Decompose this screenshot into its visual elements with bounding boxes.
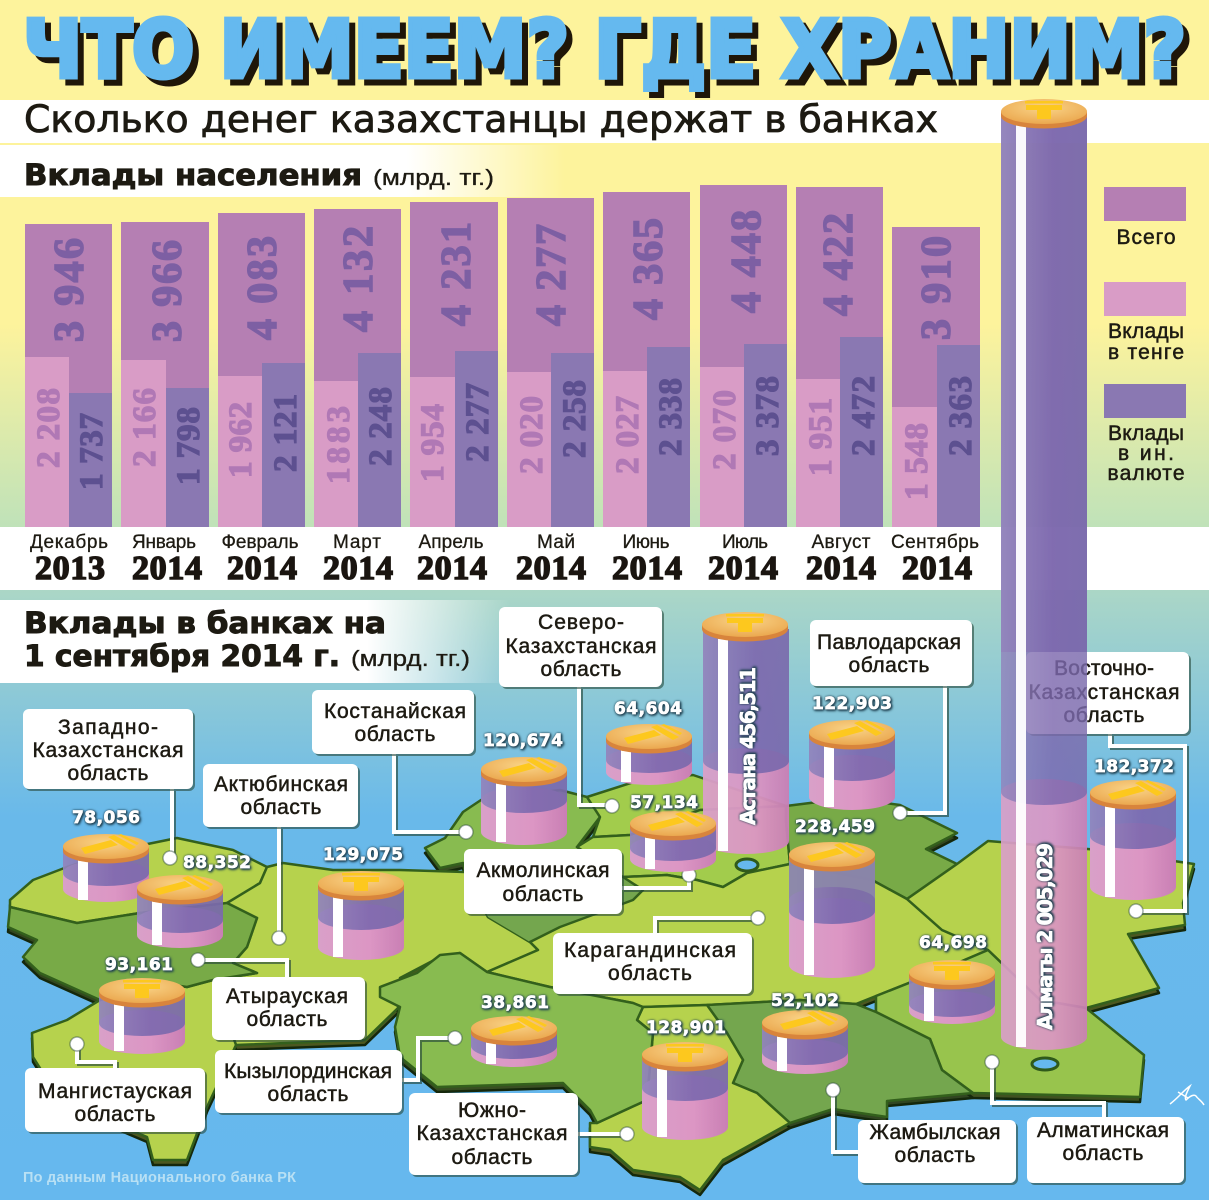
legend: Вклады	[1108, 422, 1184, 445]
heading: deposits section: (млрд. тг.)	[373, 165, 494, 190]
artist signature	[1170, 1086, 1204, 1105]
month axis band: Сентябрь	[891, 532, 979, 553]
bar group: Май 2014: 2 020	[514, 396, 550, 474]
label: Мангистауская	[25, 1068, 207, 1134]
label: Атырауская: Атырауская	[226, 985, 348, 1008]
label: Восточно-Казахстанская: Восточно-	[1054, 657, 1154, 680]
label: Актюбинская: область	[240, 796, 322, 819]
bar group: Май 2014	[507, 198, 594, 527]
label: Жамбылская: область	[894, 1144, 976, 1167]
legend: Вклады	[1108, 320, 1184, 343]
legend: Всего	[1116, 226, 1176, 249]
label: Костанайская	[312, 690, 476, 756]
cylinder: Астана 456,511	[702, 612, 789, 854]
label: Северо-Казахстанская: область	[540, 658, 622, 681]
bar group: Апрель 2014	[410, 202, 498, 527]
legend: в ин.	[1118, 442, 1174, 465]
month axis band: Февраль	[222, 532, 299, 553]
bar group: Апрель 2014: 1 954	[415, 404, 451, 482]
label: Кызылординская: Кызылординская	[224, 1060, 392, 1083]
label: Южно-Казахстанская: Южно-	[458, 1099, 526, 1122]
label: Акмолинская: область	[502, 883, 584, 906]
bar group: Март 2014: 2 248	[363, 387, 399, 466]
cylinder: Атырауская 88,352	[137, 853, 251, 948]
label: Карагандинская: область	[608, 962, 692, 985]
lake: Balkhash	[1032, 1058, 1058, 1070]
bar group: Декабрь 2013: 3 946	[47, 238, 93, 342]
month axis band: Март	[333, 532, 381, 553]
bar group: Декабрь 2013: 1 737	[74, 413, 110, 490]
label: Западно-Казахстанская	[23, 709, 195, 791]
heading: regional section	[0, 600, 510, 683]
cylinder: Мангистауская 93,161: 93,161	[105, 955, 173, 975]
label: Павлодарская	[810, 620, 974, 688]
cylinder: Костанайская 120,674: 120,674	[483, 731, 563, 751]
label: Южно-Казахстанская: область	[452, 1146, 533, 1169]
label: Костанайская: область	[354, 723, 436, 746]
heading: deposits section: Вклады населения	[24, 158, 362, 192]
label: Северо-Казахстанская: Северо-	[538, 611, 624, 634]
heading: regional section: 1 сентября 2014 г.	[24, 639, 340, 673]
label: Западно-Казахстанская: область	[68, 762, 149, 785]
label: Атырауская: область	[246, 1008, 328, 1031]
bar group: Сентябрь 2014: 1 548	[899, 423, 935, 500]
cylinder: Западно-Казахстанская 78,056	[63, 808, 149, 902]
month axis band: 2014	[902, 550, 972, 587]
bar group: Февраль 2014: 4 083	[240, 236, 286, 340]
label: Мангистауская: Мангистауская	[38, 1080, 192, 1103]
month axis band: 2014	[417, 550, 487, 587]
cylinder: Акмолинская 57,134: 57,134	[630, 793, 698, 813]
label: Северо-Казахстанская	[499, 607, 664, 689]
bar group: Август 2014: 4 422	[816, 213, 862, 316]
bar group: Январь 2014	[121, 222, 209, 527]
cylinder: Алматы 2 005,029	[1001, 99, 1087, 1050]
bar group: Февраль 2014: 1 962	[223, 402, 259, 478]
bar group: Декабрь 2013: 2 208	[31, 388, 67, 468]
month axis band: 2014	[612, 550, 682, 587]
cylinder: Атырауская 88,352: 88,352	[183, 853, 251, 873]
label: Жамбылская: Жамбылская	[870, 1121, 1000, 1144]
bar group: Июль 2014: 2 070	[707, 390, 743, 470]
month axis band: Июнь	[622, 532, 670, 553]
month axis band: Апрель	[418, 532, 484, 553]
bar group: Август 2014: 1 951	[803, 398, 839, 476]
cylinder: Павлодарская 122,903	[809, 694, 895, 810]
label: Южно-Казахстанская	[409, 1093, 580, 1177]
cylinder: Западно-Казахстанская 78,056: 78,056	[72, 808, 140, 828]
cylinder: Кызылординская 38,861: 38,861	[481, 993, 549, 1013]
label: Южно-Казахстанская: Казахстанская	[416, 1122, 568, 1145]
month axis band: Январь	[132, 532, 196, 553]
label: Восточно-Казахстанская: Казахстанская	[1028, 681, 1180, 704]
heading: deposits section	[0, 145, 565, 197]
bar group: Июнь 2014: 2 027	[610, 396, 646, 474]
cylinder: Мангистауская 93,161	[99, 955, 185, 1054]
bar group: Февраль 2014	[218, 213, 305, 527]
label: Алматинская: Алматинская	[1037, 1119, 1169, 1142]
cylinder: Северо-Казахстанская 64,604: 64,604	[614, 699, 682, 719]
month axis band: 2013	[35, 550, 105, 587]
label: Карагандинская	[553, 933, 754, 996]
label: Костанайская: Костанайская	[324, 700, 466, 723]
bar group: Апрель 2014: 2 277	[460, 383, 496, 462]
heading: regional section: Вклады в банках на	[24, 606, 386, 640]
label: Павлодарская: область	[848, 654, 930, 677]
bar group: Март 2014	[314, 209, 401, 527]
label: Карагандинская: Карагандинская	[564, 939, 736, 962]
label: Восточно-Казахстанская	[1026, 652, 1191, 736]
bar group: Февраль 2014: 2 121	[268, 394, 304, 472]
bar group: Сентябрь 2014: 2 363	[943, 376, 979, 456]
cylinder: Восточно-Казахстанская 182,372	[1090, 757, 1176, 900]
cylinder: Костанайская 120,674	[481, 731, 567, 845]
bar group: Сентябрь 2014	[892, 227, 980, 527]
bar group: Апрель 2014: 4 231	[434, 222, 480, 326]
cylinder: 64,698: 64,698	[919, 933, 987, 953]
month axis band: 2014	[323, 550, 393, 587]
month axis band	[0, 527, 1209, 590]
cylinder: Северо-Казахстанская 64,604	[606, 699, 692, 785]
bar group: Сентябрь 2014: 3 910	[914, 236, 960, 340]
cylinder: Кызылординская 38,861	[471, 993, 557, 1067]
cylinder: Павлодарская 122,903: 122,903	[812, 694, 892, 714]
bar group: Май 2014: 4 277	[529, 224, 575, 326]
bar group: Март 2014: 1883	[321, 406, 357, 484]
connector lines	[70, 686, 1187, 1154]
bar group: Июнь 2014	[603, 192, 690, 527]
label: Мангистауская: область	[74, 1103, 156, 1126]
bar group: Август 2014	[796, 187, 883, 527]
heading: regional section: (млрд. тг.)	[351, 646, 470, 671]
bar group: Январь 2014: 1 798	[171, 407, 207, 485]
cylinder: Карагандинская 228,459	[789, 817, 875, 978]
label: Кызылординская	[215, 1050, 404, 1115]
legend: валюте	[1108, 462, 1184, 485]
source note: По данным Национального банка РК	[23, 1170, 296, 1186]
lake: Astana	[736, 859, 758, 871]
month axis band: 2014	[708, 550, 778, 587]
month axis band: Июль	[722, 532, 768, 553]
label: Западно-Казахстанская: Казахстанская	[32, 739, 184, 762]
month axis band: Май	[537, 532, 575, 553]
cylinder: Южно-Казахстанская 128,901	[642, 1018, 728, 1140]
cylinder: Алматы 2 005,029: Алматы 2 005,029	[1033, 843, 1057, 1030]
label: Акмолинская	[464, 849, 624, 916]
label: Актюбинская: Актюбинская	[214, 773, 348, 796]
legend: в тенге	[1108, 341, 1184, 364]
label: Павлодарская: Павлодарская	[817, 631, 961, 654]
map of Kazakhstan	[8, 775, 1194, 1195]
cylinder: Жамбылская 52,102: 52,102	[771, 991, 839, 1011]
label: Жамбылская	[858, 1120, 1018, 1185]
month axis band: 2014	[132, 550, 202, 587]
month axis band: Август	[812, 532, 871, 553]
bar group: Декабрь 2013	[25, 224, 112, 527]
bar group: Май 2014: 2 258	[557, 380, 593, 458]
bar group: Июнь 2014: 2 338	[653, 378, 689, 456]
bar group: Июнь 2014: 4 365	[626, 218, 672, 320]
bar group: Март 2014: 4 132	[336, 226, 382, 332]
label: Восточно-Казахстанская: область	[1064, 704, 1145, 727]
bar chart: monthly deposits	[25, 185, 980, 527]
legend	[1104, 187, 1186, 485]
bar group: Август 2014: 2 472	[846, 376, 882, 456]
cylinder: Акмолинская 57,134	[630, 793, 716, 872]
cylinder: Астана 456,511: Астана 456,511	[736, 667, 760, 825]
label: Кызылординская: область	[268, 1083, 349, 1106]
cylinder: Актюбинская 129,075	[318, 845, 404, 960]
label: Алматинская: область	[1062, 1142, 1144, 1165]
label: Актюбинская	[203, 764, 360, 829]
cylinder: Южно-Казахстанская 128,901: 128,901	[646, 1018, 726, 1038]
bar group: Январь 2014: 2 166	[127, 388, 163, 467]
month axis band: 2014	[806, 550, 876, 587]
bar group: Июль 2014: 4 448	[724, 210, 770, 313]
label: Западно-Казахстанская: Западно-	[58, 716, 158, 739]
label: Алматинская	[1027, 1117, 1186, 1185]
cylinder: Карагандинская 228,459: 228,459	[795, 817, 875, 837]
month axis band: 2014	[516, 550, 586, 587]
cylinder: Актюбинская 129,075: 129,075	[323, 845, 403, 865]
month axis band: Декабрь	[30, 532, 108, 553]
cylinder: 64,698	[909, 933, 995, 1024]
subtitle: Сколько денег казахстанцы держат в банках	[24, 98, 938, 141]
month axis band: 2014	[227, 550, 297, 587]
bar group: Июль 2014	[700, 185, 787, 527]
bar group: Июль 2014: 3 378	[750, 376, 786, 456]
bar group: Январь 2014: 3 966	[145, 240, 191, 342]
label: Северо-Казахстанская: Казахстанская	[506, 635, 656, 658]
cylinder: Восточно-Казахстанская 182,372: 182,372	[1094, 757, 1174, 777]
cylinder: Жамбылская 52,102	[762, 991, 848, 1074]
region labels	[23, 607, 1191, 1185]
label: Атырауская	[212, 977, 367, 1042]
label: Акмолинская: Акмолинская	[476, 859, 610, 882]
